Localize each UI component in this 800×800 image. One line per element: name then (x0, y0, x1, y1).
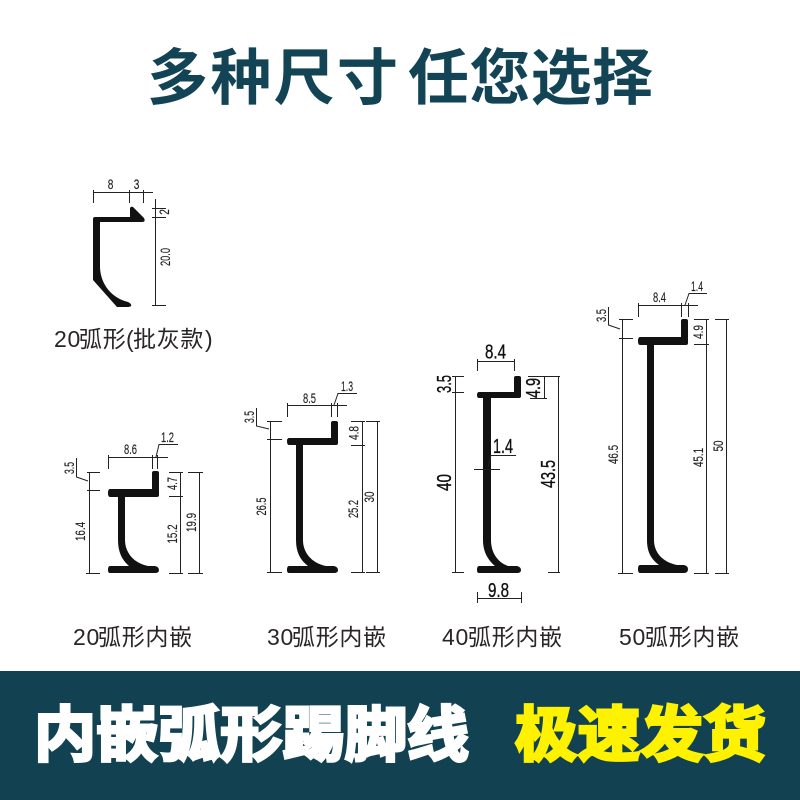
dimension labels: 20 arc plaster (108, 177, 173, 266)
dimension lines: 40 arc inlay (452, 359, 560, 603)
dimension labels: 20 arc inlay: 8.6 (124, 442, 137, 457)
dimension labels: 20 arc inlay: 3.5 (62, 462, 77, 474)
caption: 20 arc plaster: ) (205, 326, 213, 352)
caption: 20 arc inlay: 弧形内嵌 (98, 624, 193, 650)
banner text: fast shipping: 极速发货 (515, 702, 766, 769)
shape: 20 arc inlay profile (108, 471, 159, 573)
title (147, 44, 653, 112)
profile: 20 arc inlay (62, 430, 203, 574)
dimension labels: 20 arc plaster: 2 (157, 209, 172, 215)
bottom banner (0, 671, 800, 800)
dimension labels: 20 arc plaster: 8 (108, 177, 114, 192)
caption: 50 arc inlay: 弧形内嵌 (645, 624, 740, 650)
dimension labels: 20 arc inlay: 1.2 (161, 430, 174, 445)
dimension labels: 50 arc inlay (594, 279, 726, 467)
profile: 50 arc inlay (594, 279, 729, 574)
dimension labels: 30 arc inlay: 25.2 (346, 500, 361, 518)
caption: 30 arc inlay: 弧形内嵌 (292, 624, 387, 650)
dimension labels: 30 arc inlay: 26.5 (254, 498, 269, 516)
title: 多种尺寸 (147, 44, 398, 112)
dimension labels: 50 arc inlay: 45.1 (691, 448, 706, 467)
dimension labels: 50 arc inlay: 3.5 (594, 309, 609, 322)
dimension labels: 30 arc inlay: 1.3 (341, 379, 353, 394)
caption: 40 arc inlay: 40 (442, 624, 469, 650)
shape: 40 arc inlay profile (477, 376, 521, 573)
dimension labels: 50 arc inlay: 1.4 (691, 279, 703, 294)
profile: 20 arc plaster type (93, 177, 173, 307)
dimension labels: 30 arc inlay: 4.8 (346, 426, 362, 440)
dimension labels: 40 arc inlay (433, 340, 560, 602)
dimension lines: 20 arc inlay (76, 444, 203, 574)
profile: 30 arc inlay (242, 379, 380, 573)
dimension labels: 30 arc inlay: 8.5 (303, 391, 316, 406)
caption: 50 arc inlay: 50 (619, 624, 646, 650)
dimension labels: 40 arc inlay: 43.5 (537, 460, 560, 488)
dimension labels: 30 arc inlay: 30 (362, 492, 377, 502)
caption: 30 arc inlay: 30 (267, 624, 294, 650)
dimension labels: 20 arc inlay: 15.2 (165, 524, 180, 544)
dimension labels: 50 arc inlay: 4.9 (691, 325, 706, 339)
dimension labels: 20 arc plaster: 20.0 (158, 248, 173, 266)
dimension labels: 30 arc inlay (242, 379, 377, 518)
dimension lines: 20 arc plaster (94, 190, 166, 306)
dimension labels: 20 arc inlay: 19.9 (184, 513, 199, 532)
profile: 40 arc inlay (433, 340, 560, 603)
dimension labels: 40 arc inlay: 9.8 (488, 579, 509, 602)
dimension labels: 40 arc inlay: 3.5 (433, 375, 456, 393)
caption: 20 arc inlay: 20 (73, 624, 100, 650)
banner background (0, 671, 800, 800)
dimension labels: 20 arc inlay (62, 430, 199, 544)
dimension labels: 20 arc plaster: 3 (134, 177, 140, 192)
title: 任您选择 (408, 44, 653, 112)
caption: 40 arc inlay: 弧形内嵌 (468, 624, 563, 650)
dimension labels: 30 arc inlay: 3.5 (242, 411, 257, 423)
dimension labels: 40 arc inlay: 8.4 (485, 340, 506, 364)
shape: 30 arc inlay profile (287, 421, 338, 573)
dimension lines: 50 arc inlay (608, 294, 729, 574)
dimension labels: 50 arc inlay: 8.4 (653, 290, 666, 305)
caption: 20 arc plaster: ( (126, 326, 134, 352)
dimension labels: 40 arc inlay: 40 (433, 474, 456, 491)
dimension labels: 50 arc inlay: 50 (711, 440, 726, 452)
banner text: product name: 内嵌弧形踢脚线 (34, 702, 469, 769)
caption: 20 arc plaster: 20 (54, 326, 81, 352)
dimension labels: 40 arc inlay: 4.9 (522, 378, 545, 398)
shape: 50 arc inlay profile (638, 319, 688, 573)
dimension lines: 30 arc inlay (256, 394, 380, 572)
caption: 20 arc plaster: 批灰款 (133, 326, 204, 352)
dimension labels: 40 arc inlay: 1.4 (493, 435, 513, 458)
dimension labels: 20 arc inlay: 4.7 (165, 477, 180, 490)
shape: 20 arc plaster profile (93, 207, 145, 307)
dimension labels: 20 arc inlay: 16.4 (73, 522, 88, 541)
dimension labels: 50 arc inlay: 46.5 (606, 445, 621, 464)
caption: 20 arc plaster: 弧形 (79, 326, 126, 352)
